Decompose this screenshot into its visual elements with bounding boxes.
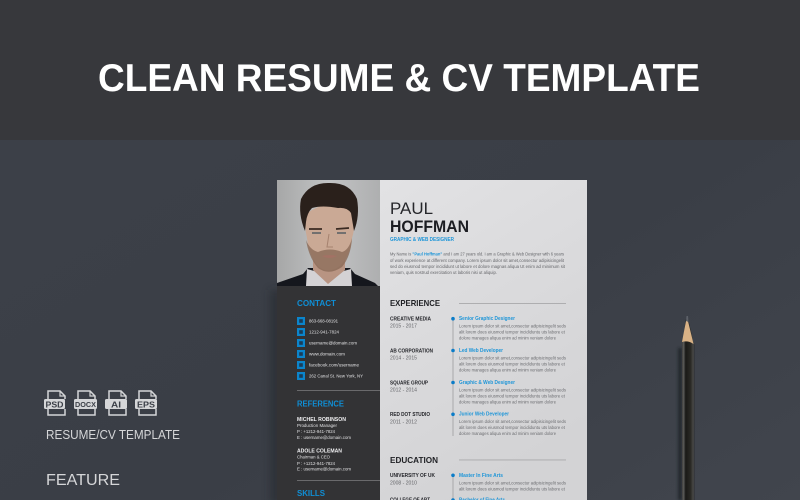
job: Square Group <box>390 380 567 404</box>
intro paragraph: My Name is "Paul Hoffman" and I am 27 years old. I am a Graphic & Web Designer with 6 years <box>390 252 565 258</box>
degree: University of UK: Lorem ipsum dolor sit amet,consectur adipisicingelit seds <box>459 480 567 486</box>
reference: Adole Coleman: P : +1212-941-7824 <box>297 461 335 467</box>
reference: Michel Robinson <box>297 417 351 441</box>
intro paragraph: veniam, quis nostrud exercitation ut laboris nisi ut aliquip. <box>390 270 497 276</box>
job: Red Dot Studio: 2011 - 2012 <box>390 419 417 425</box>
title: CLEAN RESUME & CV TEMPLATE <box>98 57 700 100</box>
job: Square Group: dolore manages aliqua enim ad minim veniam dolore <box>459 399 556 404</box>
education section: EDUCATION <box>390 455 438 465</box>
job: Creative Media: Lorem ipsum dolor sit amet,consectur adipisicingelit seds <box>459 324 567 328</box>
icon: AI: AI <box>111 400 121 410</box>
job: Square Group: Lorem ipsum dolor sit amet,consectur adipisicingelit seds <box>459 387 567 392</box>
reference heading: REFERENCE <box>297 400 345 408</box>
intro paragraph <box>390 252 566 276</box>
education section <box>390 455 567 500</box>
experience section <box>390 298 567 436</box>
icon: EPS: EPS <box>137 400 155 410</box>
reference: Michel Robinson: Production Manager <box>297 423 337 429</box>
name block: HOFFMAN <box>390 218 469 236</box>
portrait photo <box>277 180 380 286</box>
intro paragraph: of work experience at different company. Lorem ipsum dolor sit amet,consectur adipisicingelit <box>390 258 565 264</box>
header band <box>0 0 800 140</box>
job: Red Dot Studio <box>390 412 567 436</box>
job: Red Dot Studio: Junior Web Developer <box>459 412 510 418</box>
file format icons <box>44 391 157 415</box>
beard <box>306 238 352 272</box>
degree: University of UK: UNIVERSITY OF UK <box>390 473 435 479</box>
contact list: 1212-941-7824 <box>309 330 339 336</box>
job: AB Corporation: AB CORPORATION <box>390 348 433 354</box>
format caption: RESUME/CV TEMPLATE <box>46 428 180 442</box>
name block: GRAPHIC & WEB DESIGNER <box>390 237 455 243</box>
job: AB Corporation: Lorem ipsum dolor sit amet,consectur adipisicingelit seds <box>459 355 567 360</box>
contact list: facebook.com/username <box>309 362 359 368</box>
job: Square Group: alit lorem does eiusmod tempor incididuntu uts labore et <box>459 393 566 398</box>
job: Red Dot Studio: RED DOT STUDIO <box>390 412 430 418</box>
job: AB Corporation: 2014 - 2015 <box>390 356 417 362</box>
skills heading: SKILLS <box>297 489 326 498</box>
eyes and brows <box>309 228 349 233</box>
name block: PAUL <box>390 200 433 218</box>
job: Creative Media: alit lorem does eiusmod tempor incididuntu uts labore et <box>459 330 566 334</box>
contact list: 863-668-08191 <box>309 318 338 324</box>
job: Red Dot Studio: Lorem ipsum dolor sit amet,consectur adipisicingelit seds <box>459 419 567 424</box>
job: AB Corporation: dolore manages aliqua enim ad minim veniam dolore <box>459 367 556 372</box>
icon: PSD: PSD <box>46 400 64 410</box>
degree: University of UK: 2008 - 2010 <box>390 480 417 486</box>
reference: Adole Coleman: ADOLE COLEMAN <box>297 448 342 454</box>
job: Creative Media: CREATIVE MEDIA <box>390 316 431 322</box>
reference: Michel Robinson: E : username@domain.com <box>297 435 351 441</box>
job: AB Corporation <box>390 348 567 372</box>
icon: DOCX: DOCX <box>75 402 96 409</box>
job: Creative Media: dolore manages aliqua enim ad minim veniam dolore <box>459 336 556 340</box>
reference: Adole Coleman: Chairman & CEO <box>297 454 330 460</box>
contact list: 262 Canal St. New York, NY <box>309 374 364 380</box>
jacket <box>277 268 378 286</box>
job: Red Dot Studio: dolore manages aliqua enim ad minim veniam dolore <box>459 431 556 436</box>
resume shadow <box>270 290 282 500</box>
job: Square Group: 2012 - 2014 <box>390 388 417 394</box>
job: Creative Media <box>390 316 567 340</box>
job: Square Group: Graphic & Web Designer <box>459 380 516 386</box>
job: Square Group: SQUARE GROUP <box>390 380 428 386</box>
resume paper <box>380 180 587 500</box>
job: AB Corporation: Led Web Developer <box>459 348 504 354</box>
reference: Michel Robinson: P : +1212-941-7824 <box>297 429 335 435</box>
face <box>305 204 354 270</box>
job: Creative Media: 2015 - 2017 <box>390 324 417 330</box>
degree: University of UK: alit lorem does eiusmod tempor incididuntu uts labore et <box>459 486 566 492</box>
shirt <box>306 269 352 286</box>
nose and mouth <box>322 234 337 258</box>
sidebar <box>277 286 380 500</box>
pencil <box>678 316 694 500</box>
degree: University of UK <box>390 473 567 492</box>
hair <box>300 183 358 231</box>
contact list: www.domain.com <box>309 352 345 358</box>
contact heading: CONTACT <box>297 298 337 308</box>
reference: Michel Robinson: MICHEL ROBINSON <box>297 417 346 423</box>
job: AB Corporation: alit lorem does eiusmod tempor incididuntu uts labore et <box>459 361 566 366</box>
contact list: username@domain.com <box>309 340 357 346</box>
reference: Adole Coleman <box>297 448 351 472</box>
job: Red Dot Studio: alit lorem does eiusmod tempor incididuntu uts labore et <box>459 425 566 430</box>
neck <box>313 258 345 284</box>
name block <box>390 200 469 243</box>
intro paragraph: sed do eiusmod tempor incididunt ut labore et dolore magnas aliqua Ut enim ad minimum sit <box>390 264 566 270</box>
job: Creative Media: Senior Graphic Designer <box>459 316 516 322</box>
contact list <box>297 317 364 380</box>
reference: Adole Coleman: E : username@domain.com <box>297 466 351 472</box>
degree: University of UK: Master In Fine Arts <box>459 473 503 479</box>
experience section: EXPERIENCE <box>390 298 440 308</box>
degree: College of Art <box>390 498 505 500</box>
feature heading: FEATURE <box>46 472 120 489</box>
